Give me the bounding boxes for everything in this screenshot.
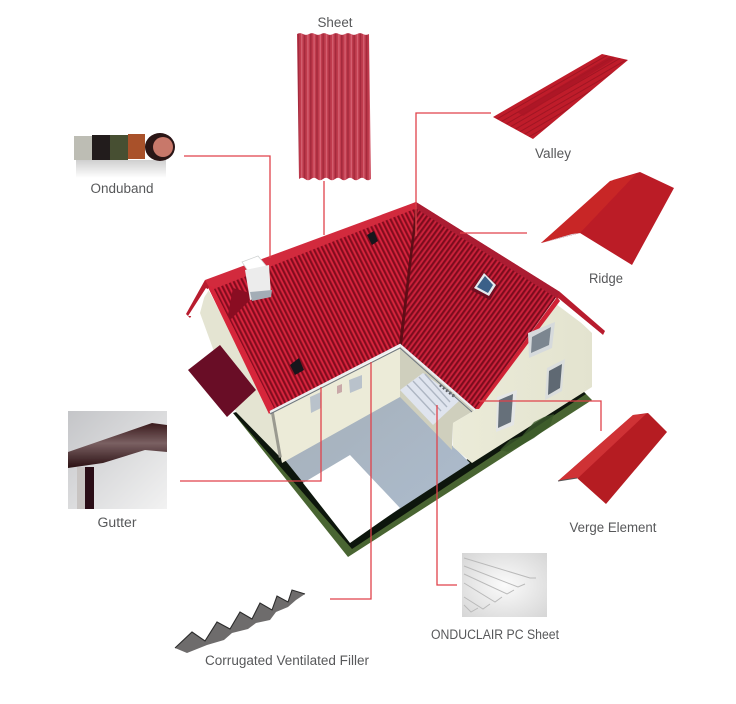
leader line: Verge Element	[479, 401, 601, 431]
ridge product	[541, 172, 674, 265]
onduband rolls	[74, 136, 92, 160]
awning	[188, 345, 256, 417]
chimney	[242, 256, 272, 301]
right roof slope	[400, 202, 560, 410]
verge element product	[558, 413, 667, 504]
sheet product	[297, 33, 371, 180]
left gable wing wall	[200, 287, 290, 457]
gutter down pipe	[271, 412, 282, 458]
valley line	[399, 202, 418, 345]
gutter channel	[68, 423, 167, 468]
onduband reflection	[76, 160, 166, 178]
heading: Sheet: Sheet	[318, 15, 353, 30]
white patio slab	[303, 455, 400, 543]
house illustration	[186, 202, 605, 557]
leader line: Gutter	[180, 387, 321, 481]
label: Verge Element: Verge Element	[570, 520, 657, 535]
skylight	[471, 272, 498, 300]
leader line: Onduband	[184, 156, 270, 258]
right ridge trim	[415, 202, 560, 299]
onduband roll end	[145, 133, 175, 161]
down pipe	[77, 467, 85, 509]
valley product	[493, 54, 628, 139]
inner right wall	[400, 345, 475, 450]
label: Ridge: Ridge	[589, 271, 623, 286]
leader line: Valley	[416, 113, 491, 236]
hedge shadow along ground	[233, 386, 586, 549]
leader line: Sheet	[323, 181, 325, 235]
leader line: Corrugated Ventilated Filler	[330, 362, 371, 599]
leader line: ONDUCLAIR PC Sheet	[437, 405, 457, 585]
left ridge trim	[205, 202, 417, 289]
onduband product	[74, 133, 175, 178]
ONDUCLAIR PC sheet product	[462, 553, 547, 617]
left verge trim	[207, 285, 274, 414]
inner white fascia	[270, 345, 475, 412]
label: Corrugated Ventilated Filler: Corrugated Ventilated Filler	[205, 653, 370, 668]
upper side window	[528, 322, 555, 358]
label: Onduband: Onduband	[90, 181, 154, 196]
roof vent left upper	[367, 231, 378, 245]
inner left wall	[271, 347, 400, 463]
ground lawn	[233, 386, 592, 557]
left gable eave	[186, 280, 209, 318]
label: Valley: Valley	[535, 146, 571, 161]
gutter product	[68, 411, 167, 509]
chimney shadow on roof	[228, 288, 250, 322]
right roof lower verge	[475, 297, 560, 409]
right house wall	[453, 300, 592, 463]
middle side window	[545, 359, 565, 400]
left roof slope	[207, 202, 416, 412]
shrubs	[500, 414, 554, 452]
label: Gutter: Gutter	[98, 515, 137, 530]
inner wall windows	[310, 375, 362, 413]
label: ONDUCLAIR PC Sheet: ONDUCLAIR PC Sheet	[431, 627, 559, 642]
right gable eave	[557, 292, 605, 335]
pergola	[400, 373, 460, 425]
courtyard paving	[285, 394, 470, 541]
roof vent left lower	[290, 358, 304, 375]
lower side window	[496, 390, 517, 432]
leader line: Ridge	[460, 232, 527, 234]
corrugated ventilated filler product	[175, 590, 305, 653]
